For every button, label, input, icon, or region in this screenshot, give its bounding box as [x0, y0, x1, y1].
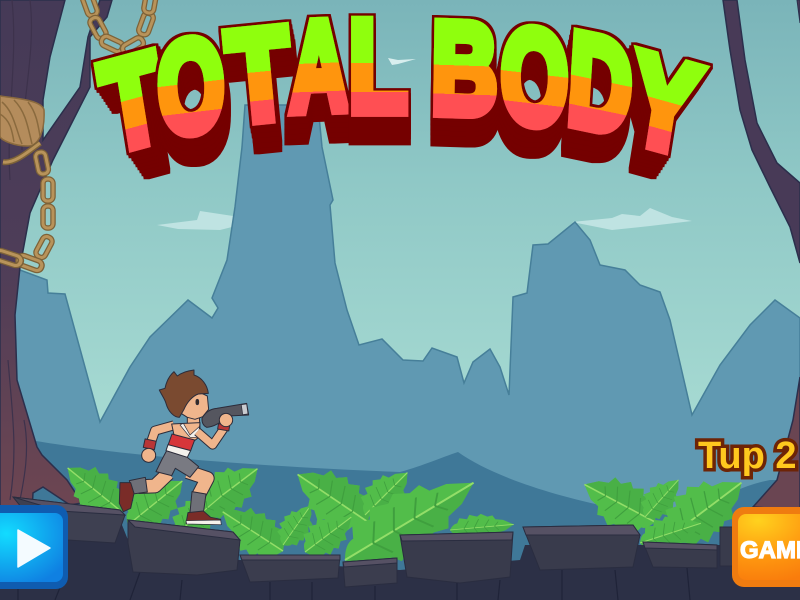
camera lens end [241, 404, 248, 415]
ground cracks [18, 568, 690, 600]
cloud left [157, 211, 233, 230]
red top [168, 434, 195, 451]
front wristband [218, 424, 230, 431]
rock ground base [0, 520, 800, 600]
back leg [138, 473, 168, 487]
ferns [54, 450, 758, 586]
title: T [222, 2, 297, 150]
cloud small [388, 58, 416, 65]
back shoe [119, 483, 134, 512]
play button [0, 505, 68, 589]
game button [732, 507, 800, 587]
cloud right [572, 208, 692, 230]
face [179, 392, 209, 419]
front arm [197, 428, 224, 445]
title: O [155, 10, 227, 163]
title: D [564, 4, 636, 163]
white straps [180, 423, 199, 437]
hair [159, 370, 208, 417]
left tree [0, 0, 112, 520]
white waist band [166, 445, 191, 457]
tup counter label: Tup 2 [698, 435, 797, 477]
front leg [187, 472, 207, 495]
back leg skin [138, 473, 168, 487]
chest [172, 423, 200, 442]
front shoe [186, 511, 221, 525]
title: T [93, 26, 172, 179]
platform rocks [13, 497, 800, 587]
right tree branch [723, 0, 800, 263]
right tree corner branch [797, 0, 800, 23]
eye [196, 399, 199, 405]
title: O [499, 0, 570, 155]
shorts [156, 451, 199, 477]
runner character [119, 370, 249, 525]
back fist [142, 448, 156, 462]
icon: play triangle [18, 530, 50, 567]
neck [187, 415, 200, 428]
icon: camera held by runner [202, 403, 249, 427]
foreground hills [0, 440, 800, 600]
back arm skin [149, 425, 174, 447]
upper chain [82, 0, 157, 56]
front sock [190, 492, 206, 513]
front arm skin [197, 428, 224, 445]
button face [0, 513, 63, 582]
back arm [149, 425, 174, 447]
front leg skin [187, 472, 207, 495]
title [93, 0, 708, 183]
back sock [129, 477, 147, 494]
shoe sole [186, 520, 221, 525]
right tree trunk [753, 377, 800, 510]
rope knot and lower chain [0, 96, 54, 272]
title: Y [621, 25, 708, 183]
button face [738, 514, 800, 580]
back wristband [143, 439, 156, 450]
front fist [219, 413, 233, 427]
